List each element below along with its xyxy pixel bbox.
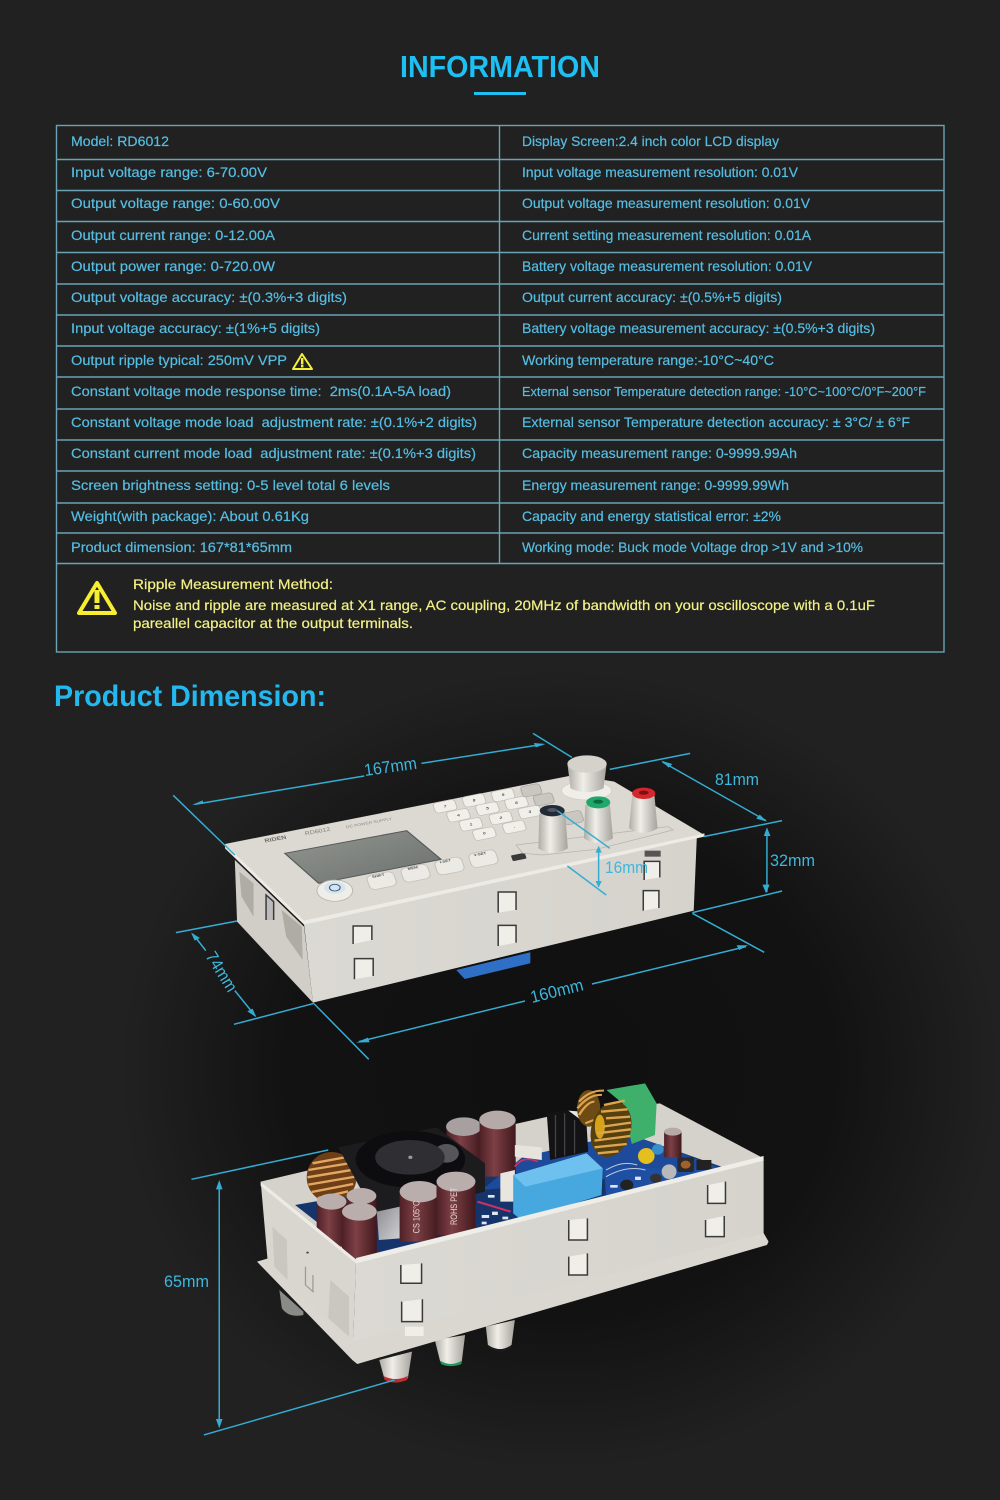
label: 16mm: 16mm [605,858,648,877]
row: input voltage resolution: Input voltage measurement resolution: 0.01V [522,164,799,180]
device: numeric keypad: 1 [470,822,473,826]
device: black terminal [538,805,568,853]
dimension lines: 16mm [557,811,610,895]
dimension lines: 74mm [176,921,256,1017]
row: CV response time: Constant voltage mode response time: 2ms(0.1A-5A load) [71,383,451,399]
case: slots [401,1182,725,1336]
row: input voltage range: Input voltage range: 6-70.00V [71,164,268,180]
device: main rotary knob [562,755,612,800]
row: input voltage accuracy: Input voltage accuracy: ±(1%+5 digits) [71,320,320,336]
component: blue relay [513,1153,603,1220]
case: circuit board [295,1133,726,1260]
device: case body [225,775,704,1003]
label: 32mm: 32mm [770,851,815,870]
device: function buttons: I-SET [439,858,452,864]
icon: warning triangle [79,583,115,613]
device: brand text: DC POWER SUPPLY [345,816,393,829]
row: battery voltage resolution: Battery voltage measurement resolution: 0.01V [522,258,813,274]
row: output current accuracy: Output current accuracy: ±(0.5%+5 digits) [522,289,782,305]
device: red terminal [629,788,658,833]
row: energy range: Energy measurement range: 0-9999.99Wh [522,477,789,493]
device: power button [317,880,353,901]
diagram: assembled power supply with dimensions [173,733,815,1059]
case: mounting flange [257,1232,769,1364]
case: bottom knobs [279,1290,515,1382]
component: front capacitors: CS 105°C [412,1201,422,1233]
device: numeric keypad: 2 [499,816,503,820]
device: numeric keypad: . [514,825,515,829]
device: function buttons: MEM [407,865,418,871]
row: battery voltage accuracy: Battery voltage measurement accuracy: ±(0.5%+3 digits) [522,320,875,336]
label: 160mm: 160mm [528,975,585,1007]
row: working mode: Working mode: Buck mode Voltage drop >1V and >10% [522,539,863,555]
row: external sensor range: External sensor Temperature detection range: -10°C~100°C/0°F~200°F [522,384,926,399]
heading: Product Dimension: Product Dimension: [54,680,326,713]
dimension lines: 32mm [692,821,782,913]
device: numeric keypad: 3 [529,810,532,814]
row: output voltage range: Output voltage range: 0-60.00V [71,195,281,211]
dimension lines: 81mm [610,753,767,822]
device: numeric keypad: 5 [486,806,490,811]
component: front capacitors: ROHS PET [449,1188,459,1225]
row: CV load adjustment: Constant voltage mode load adjustment rate: ±(0.1%+2 digits) [71,414,477,430]
label: 167mm: 167mm [363,754,418,780]
component: left copper toroid [307,1152,356,1203]
dimension lines: 160mm [234,913,764,1059]
component: front capacitors [317,1172,475,1263]
component: green terminal block [606,1083,657,1144]
row: weight: Weight(with package): About 0.61Kg [71,508,309,524]
component: small parts on right [638,1128,711,1179]
row: capacity range: Capacity measurement range: 0-9999.99Ah [522,445,797,461]
callout text: Ripple Measurement Method: [133,576,333,592]
callout text: Noise and ripple are measured at X1 range, AC coupling, 20MHz of bandwidth on your oscilloscope with a 0.1uF [133,597,875,613]
device: function buttons: SHIFT [371,872,386,879]
row: current setting resolution: Current setting measurement resolution: 0.01A [522,227,812,243]
row: display screen: Display Screen:2.4 inch color LCD display [522,133,779,149]
row: screen brightness: Screen brightness setting: 0-5 level total 6 levels [71,477,390,493]
device: LCD screen [285,831,441,883]
device: numeric keypad: 6 [515,801,519,805]
label: 74mm: 74mm [202,948,241,995]
row: model: Model: RD6012 [71,133,169,149]
device: function buttons [366,849,499,890]
row: working temperature: Working temperature range:-10°C~40°C [522,352,774,368]
callout: ripple measurement method [79,576,875,631]
title: INFORMATION: INFORMATION [400,49,600,84]
device: numeric keypad: 8 [473,798,476,802]
icon: small warning triangle [293,354,312,369]
row: output current range: Output current range: 0-12.00A [71,227,276,243]
row: output voltage accuracy: Output voltage accuracy: ±(0.3%+3 digits) [71,289,347,305]
row: statistical error: Capacity and energy statistical error: ±2% [522,508,781,524]
device: function buttons: V-SET [473,851,487,857]
device: numeric keypad: 0 [483,831,486,836]
case: rear inner walls [261,1103,764,1262]
specification table [56,125,944,652]
component: heat sink [547,1109,588,1160]
case: front wall [353,1156,764,1342]
device: side slots [353,851,661,979]
label: 65mm: 65mm [164,1272,209,1291]
device: numeric keypad: 4 [457,813,460,817]
device: numeric keypad: 7 [444,804,447,808]
dimension lines: 65mm [191,1150,395,1435]
row: output voltage resolution: Output voltage measurement resolution: 0.01V [522,195,811,211]
callout text [133,576,875,631]
row: product dimension: Product dimension: 167*81*65mm [71,539,292,555]
device: brand text: RIDEN [264,834,288,844]
callout text: pareallel capacitor at the output terminals. [133,615,413,631]
row: output ripple: Output ripple typical: 250mV VPP [71,352,287,368]
dimension lines: 167mm [173,733,572,855]
component: blue PCB traces [482,1133,722,1224]
diagram: open case showing circuit board with height dimension [164,1083,769,1435]
device: numeric keypad: 9 [502,793,505,797]
component: right copper toroid [577,1090,637,1160]
case: left wall [261,1182,356,1342]
device: USB port [511,827,673,861]
component: cooling fan [338,1127,485,1240]
component: rear capacitors [446,1111,516,1183]
row: external sensor accuracy: External sensor Temperature detection accuracy: ± 3°C/ ± 6°F [522,414,910,430]
device: numeric keypad [432,783,584,841]
device: blue underside part [456,952,530,979]
row: output power range: Output power range: 0-720.0W [71,258,276,274]
device: brand text [264,816,393,844]
device: green terminal [584,796,613,843]
component: white connector [478,1145,542,1212]
label: 81mm: 81mm [715,770,759,789]
device: brand text: RD6012 [304,826,332,837]
row: CC load adjustment: Constant current mode load adjustment rate: ±(0.1%+3 digits) [71,445,476,461]
